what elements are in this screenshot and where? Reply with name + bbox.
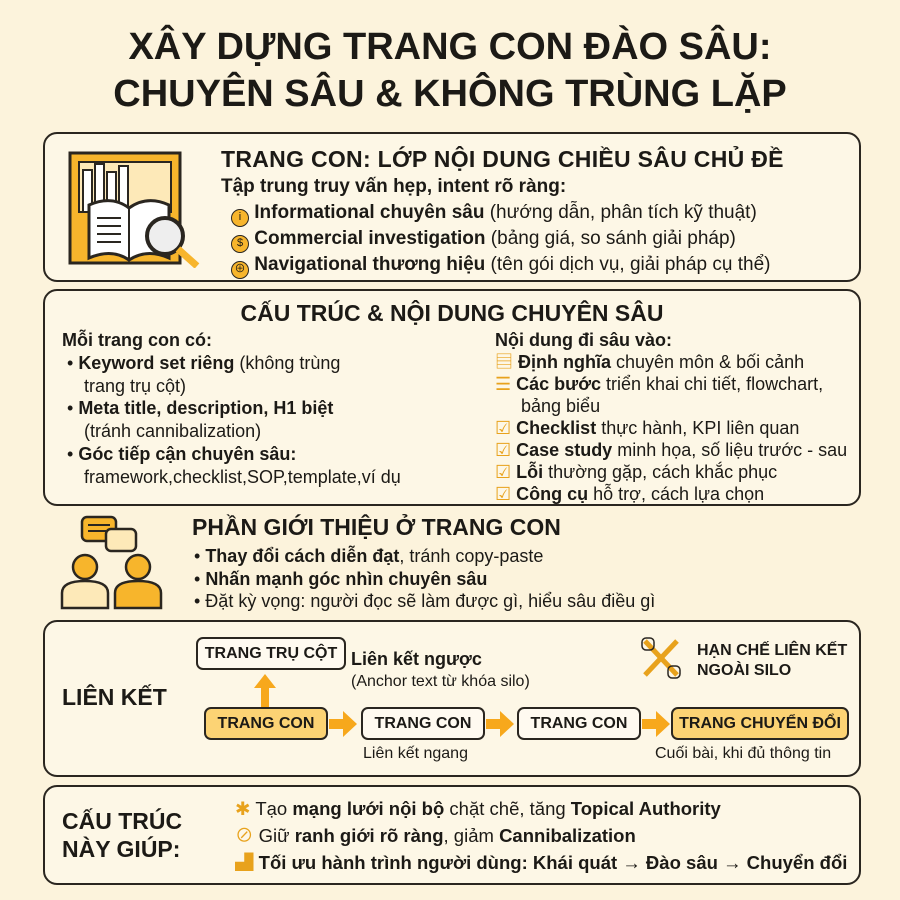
panel: linking: TRANG CON bbox=[375, 715, 471, 732]
left column: • Góc tiếp cận chuyên sâu: bbox=[67, 444, 296, 464]
intro bullets bbox=[194, 546, 655, 611]
arrow up bbox=[254, 674, 276, 707]
limit label bbox=[697, 640, 848, 679]
panel: structure and content bbox=[43, 289, 861, 506]
back link label: (Anchor text từ khóa silo) bbox=[351, 673, 530, 690]
title: XÂY DỰNG TRANG CON ĐÀO SÂU: bbox=[128, 26, 772, 68]
left column: Mỗi trang con có: bbox=[62, 330, 212, 350]
intro bullets: • Nhấn mạnh góc nhìn chuyên sâu bbox=[194, 568, 487, 588]
intent list: i bbox=[239, 211, 241, 223]
flow row bbox=[204, 707, 328, 740]
benefits list bbox=[235, 798, 847, 873]
right column: ☰ Các bước triển khai chi tiết, flowchart, bbox=[495, 374, 823, 394]
right column: ☑ Công cụ hỗ trợ, cách lựa chọn bbox=[495, 484, 764, 504]
intent list: ⊕ bbox=[234, 263, 246, 275]
box: pillar: TRANG TRỤ CỘT bbox=[205, 645, 337, 662]
left column: framework,checklist,SOP,template,ví dụ bbox=[84, 467, 401, 487]
right column: Nội dung đi sâu vào: bbox=[495, 330, 672, 350]
subheading: Tập trung truy vấn hẹp, intent rõ ràng: bbox=[221, 176, 566, 197]
right column: ☑ Lỗi thường gặp, cách khắc phục bbox=[495, 462, 777, 482]
left column bbox=[62, 330, 401, 487]
benefits list: ⊘ Giữ ranh giới rõ ràng, giảm Cannibalization bbox=[235, 825, 636, 846]
heading: TRANG CON: LỚP NỘI DUNG CHIỀU SÂU CHỦ ĐỀ bbox=[221, 146, 784, 172]
benefits list: ✱ Tạo mạng lưới nội bộ chặt chẽ, tăng Topical Authority bbox=[235, 798, 721, 819]
left column: • Keyword set riêng (không trùng bbox=[67, 353, 340, 373]
right column: ☑ Checklist thực hành, KPI liên quan bbox=[495, 418, 799, 438]
right column: ☑ Case study minh họa, số liệu trước - sau bbox=[495, 440, 847, 460]
right column: ▤ Định nghĩa chuyên môn & bối cảnh bbox=[495, 352, 804, 372]
icon: broken chain bbox=[641, 637, 681, 679]
icon: bookshelf with book and magnifier bbox=[68, 152, 200, 268]
back link label: Liên kết ngược bbox=[351, 649, 482, 669]
left column: • Meta title, description, H1 biệt bbox=[67, 398, 333, 418]
limit label: HẠN CHẾ LIÊN KẾT bbox=[697, 642, 847, 659]
heading: CẤU TRÚC & NỘI DUNG CHUYÊN SÂU bbox=[241, 300, 663, 326]
left column: (tránh cannibalization) bbox=[84, 421, 261, 441]
icon: two people talking bbox=[60, 516, 162, 610]
right column bbox=[495, 330, 847, 504]
label: NÀY GIÚP: bbox=[62, 836, 180, 862]
panel: linking bbox=[43, 620, 861, 777]
back link label bbox=[351, 649, 530, 690]
benefits list: ▟ Tối ưu hành trình người dùng: Khái quát → Đào sâu → Chuyển đổi bbox=[235, 852, 847, 873]
intent list: Commercial investigation (bảng giá, so sánh giải pháp) bbox=[254, 228, 736, 249]
title bbox=[113, 24, 787, 115]
flow row: TRANG CON bbox=[218, 715, 314, 732]
label: CẤU TRÚC bbox=[62, 808, 182, 834]
intent list bbox=[231, 201, 770, 279]
box: pillar bbox=[196, 637, 346, 670]
label: LIÊN KẾT bbox=[62, 684, 167, 710]
panel: linking: TRANG CON bbox=[531, 715, 627, 732]
title: CHUYÊN SÂU & KHÔNG TRÙNG LẶP bbox=[113, 73, 787, 115]
intent list: $ bbox=[237, 237, 243, 249]
horizontal link label: Liên kết ngang bbox=[363, 745, 468, 762]
conversion label: Cuối bài, khi đủ thông tin bbox=[655, 745, 831, 762]
limit label: NGOÀI SILO bbox=[697, 662, 791, 679]
intro bullets: • Thay đổi cách diễn đạt, tránh copy-paste bbox=[194, 546, 543, 566]
heading: intro section: PHẦN GIỚI THIỆU Ở TRANG CON bbox=[192, 514, 561, 540]
intent list: Informational chuyên sâu (hướng dẫn, phân tích kỹ thuật) bbox=[254, 202, 757, 223]
left column: trang trụ cột) bbox=[84, 376, 186, 396]
panel: linking: TRANG CHUYỂN ĐỔI bbox=[679, 715, 841, 732]
panel: trang con layer bbox=[43, 132, 861, 282]
label bbox=[62, 808, 182, 862]
panel: benefits bbox=[43, 785, 861, 885]
intent list: Navigational thương hiệu (tên gói dịch vụ, giải pháp cụ thể) bbox=[254, 254, 770, 275]
intro bullets: • Đặt kỳ vọng: người đọc sẽ làm được gì, hiểu sâu điều gì bbox=[194, 591, 655, 611]
right column: bảng biểu bbox=[521, 396, 600, 416]
